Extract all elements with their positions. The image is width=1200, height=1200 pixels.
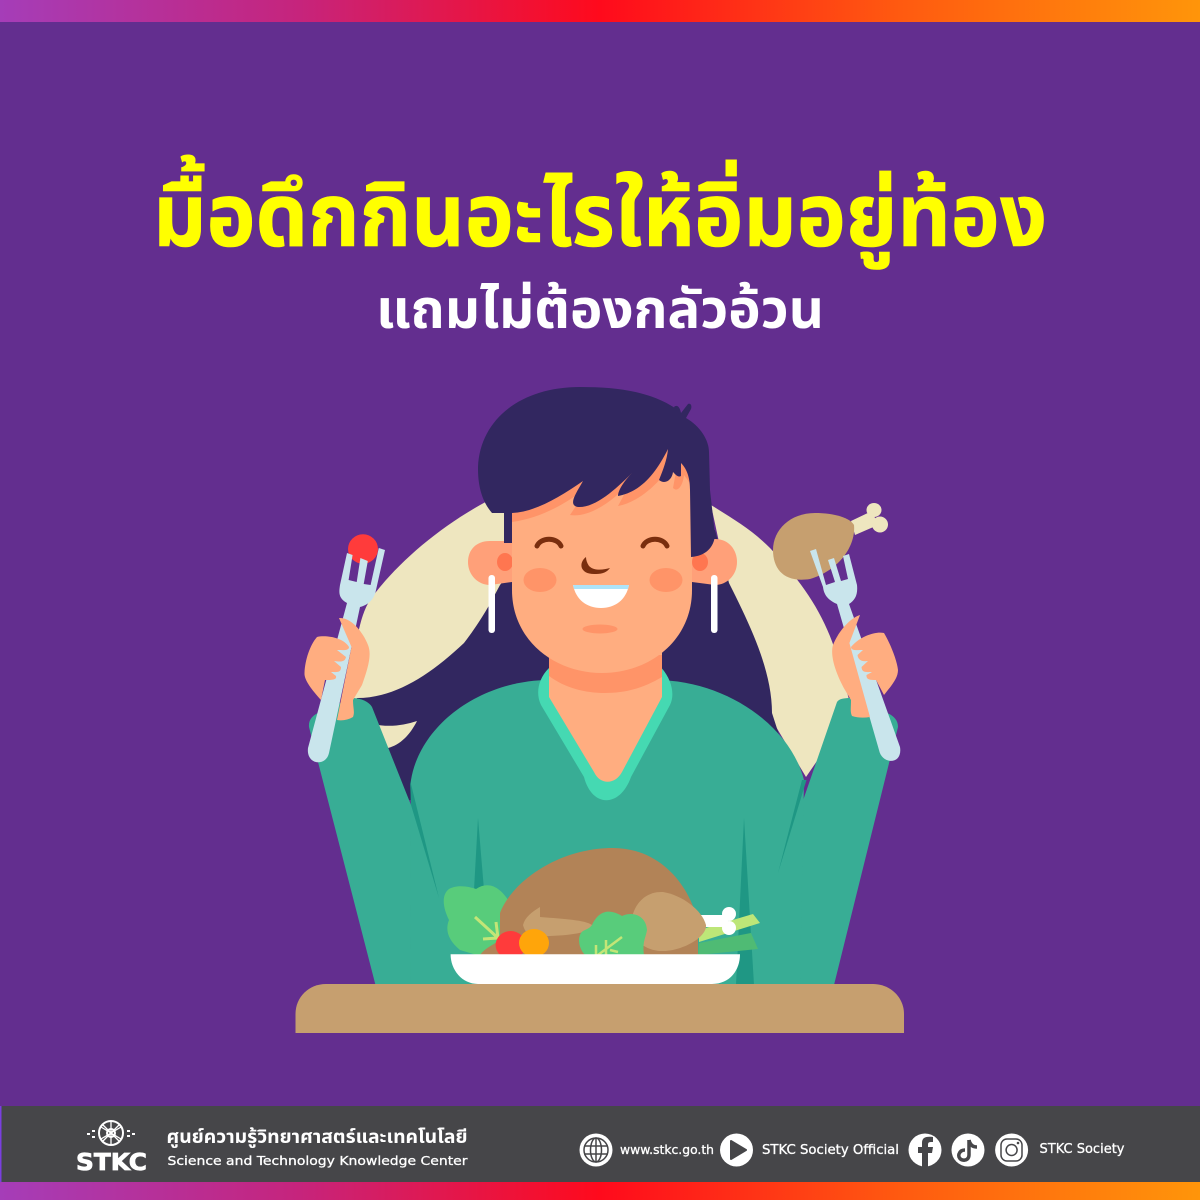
left lettuce	[444, 885, 515, 956]
lower lip shadow	[582, 624, 618, 634]
right cheek	[650, 568, 682, 592]
icon: play	[720, 1134, 753, 1166]
right hand fingers	[851, 633, 898, 695]
neck and chest	[549, 650, 662, 782]
turkey thigh	[631, 892, 706, 951]
right thumb	[832, 615, 870, 718]
left fork	[308, 548, 385, 762]
collar	[538, 668, 672, 800]
cream hair tip	[378, 721, 417, 748]
website: www.stkc.go.th	[620, 1142, 714, 1157]
footer band	[0, 1106, 1200, 1182]
hair shadow on forehead	[512, 440, 692, 522]
footer logo wordmark: STKC	[76, 1150, 147, 1176]
youtube name: STKC Society Official	[762, 1142, 899, 1158]
front hair	[478, 387, 715, 557]
left lettuce vein	[475, 917, 498, 939]
neck shadow	[549, 655, 662, 693]
roast chicken plate	[444, 848, 760, 984]
right earring	[711, 575, 718, 633]
left ear	[468, 541, 513, 585]
red tomato	[496, 931, 526, 959]
right arm	[740, 698, 898, 985]
roasted drumstick on fork	[773, 503, 888, 580]
icon: tiktok	[952, 1134, 984, 1166]
left hand fingers	[304, 636, 349, 700]
title: มื้อดึกกินอะไรให้อิ่มอยู่ท้อง	[153, 154, 1047, 270]
right lettuce	[579, 912, 647, 955]
icon: facebook	[908, 1134, 942, 1166]
cream hair highlight, left	[352, 497, 510, 700]
celery stalk	[699, 914, 760, 942]
icon: instagram	[995, 1134, 1028, 1166]
icon: globe	[580, 1134, 612, 1166]
mouth	[573, 585, 629, 608]
face	[512, 440, 692, 673]
right ear	[692, 539, 737, 585]
organisation name Thai: ศูนย์ความรู้วิทยาศาสตร์และเทคโนโลยี	[166, 1126, 468, 1148]
plate	[451, 954, 740, 984]
celery leaves	[698, 933, 758, 955]
shirt creases	[410, 780, 806, 985]
left earring	[488, 575, 495, 633]
bottom gradient bar	[0, 1182, 1200, 1200]
footer logo emblem	[87, 1121, 135, 1145]
left cheek	[524, 568, 556, 592]
left thumb	[337, 618, 370, 720]
subtitle: แถมไม่ต้องกลัวอ้วน	[376, 280, 824, 340]
nose	[581, 557, 610, 574]
right lettuce vein	[596, 937, 622, 955]
dark back hair	[340, 530, 800, 800]
right fork	[810, 549, 900, 761]
torso	[410, 680, 804, 985]
right eye	[643, 539, 667, 546]
cream hair highlight, right	[711, 505, 852, 777]
left eye	[537, 539, 561, 546]
illustration: woman eating	[304, 387, 900, 985]
orange tomato	[519, 929, 549, 957]
turkey wing	[523, 907, 592, 936]
table	[296, 984, 904, 1033]
instagram name: STKC Society	[1040, 1141, 1124, 1157]
turkey bone	[700, 907, 736, 935]
turkey body	[480, 848, 698, 955]
left arm	[309, 698, 440, 985]
organisation name English: Science and Technology Knowledge Center	[168, 1153, 468, 1168]
tomato on fork	[348, 534, 378, 564]
top gradient bar	[0, 0, 1200, 22]
